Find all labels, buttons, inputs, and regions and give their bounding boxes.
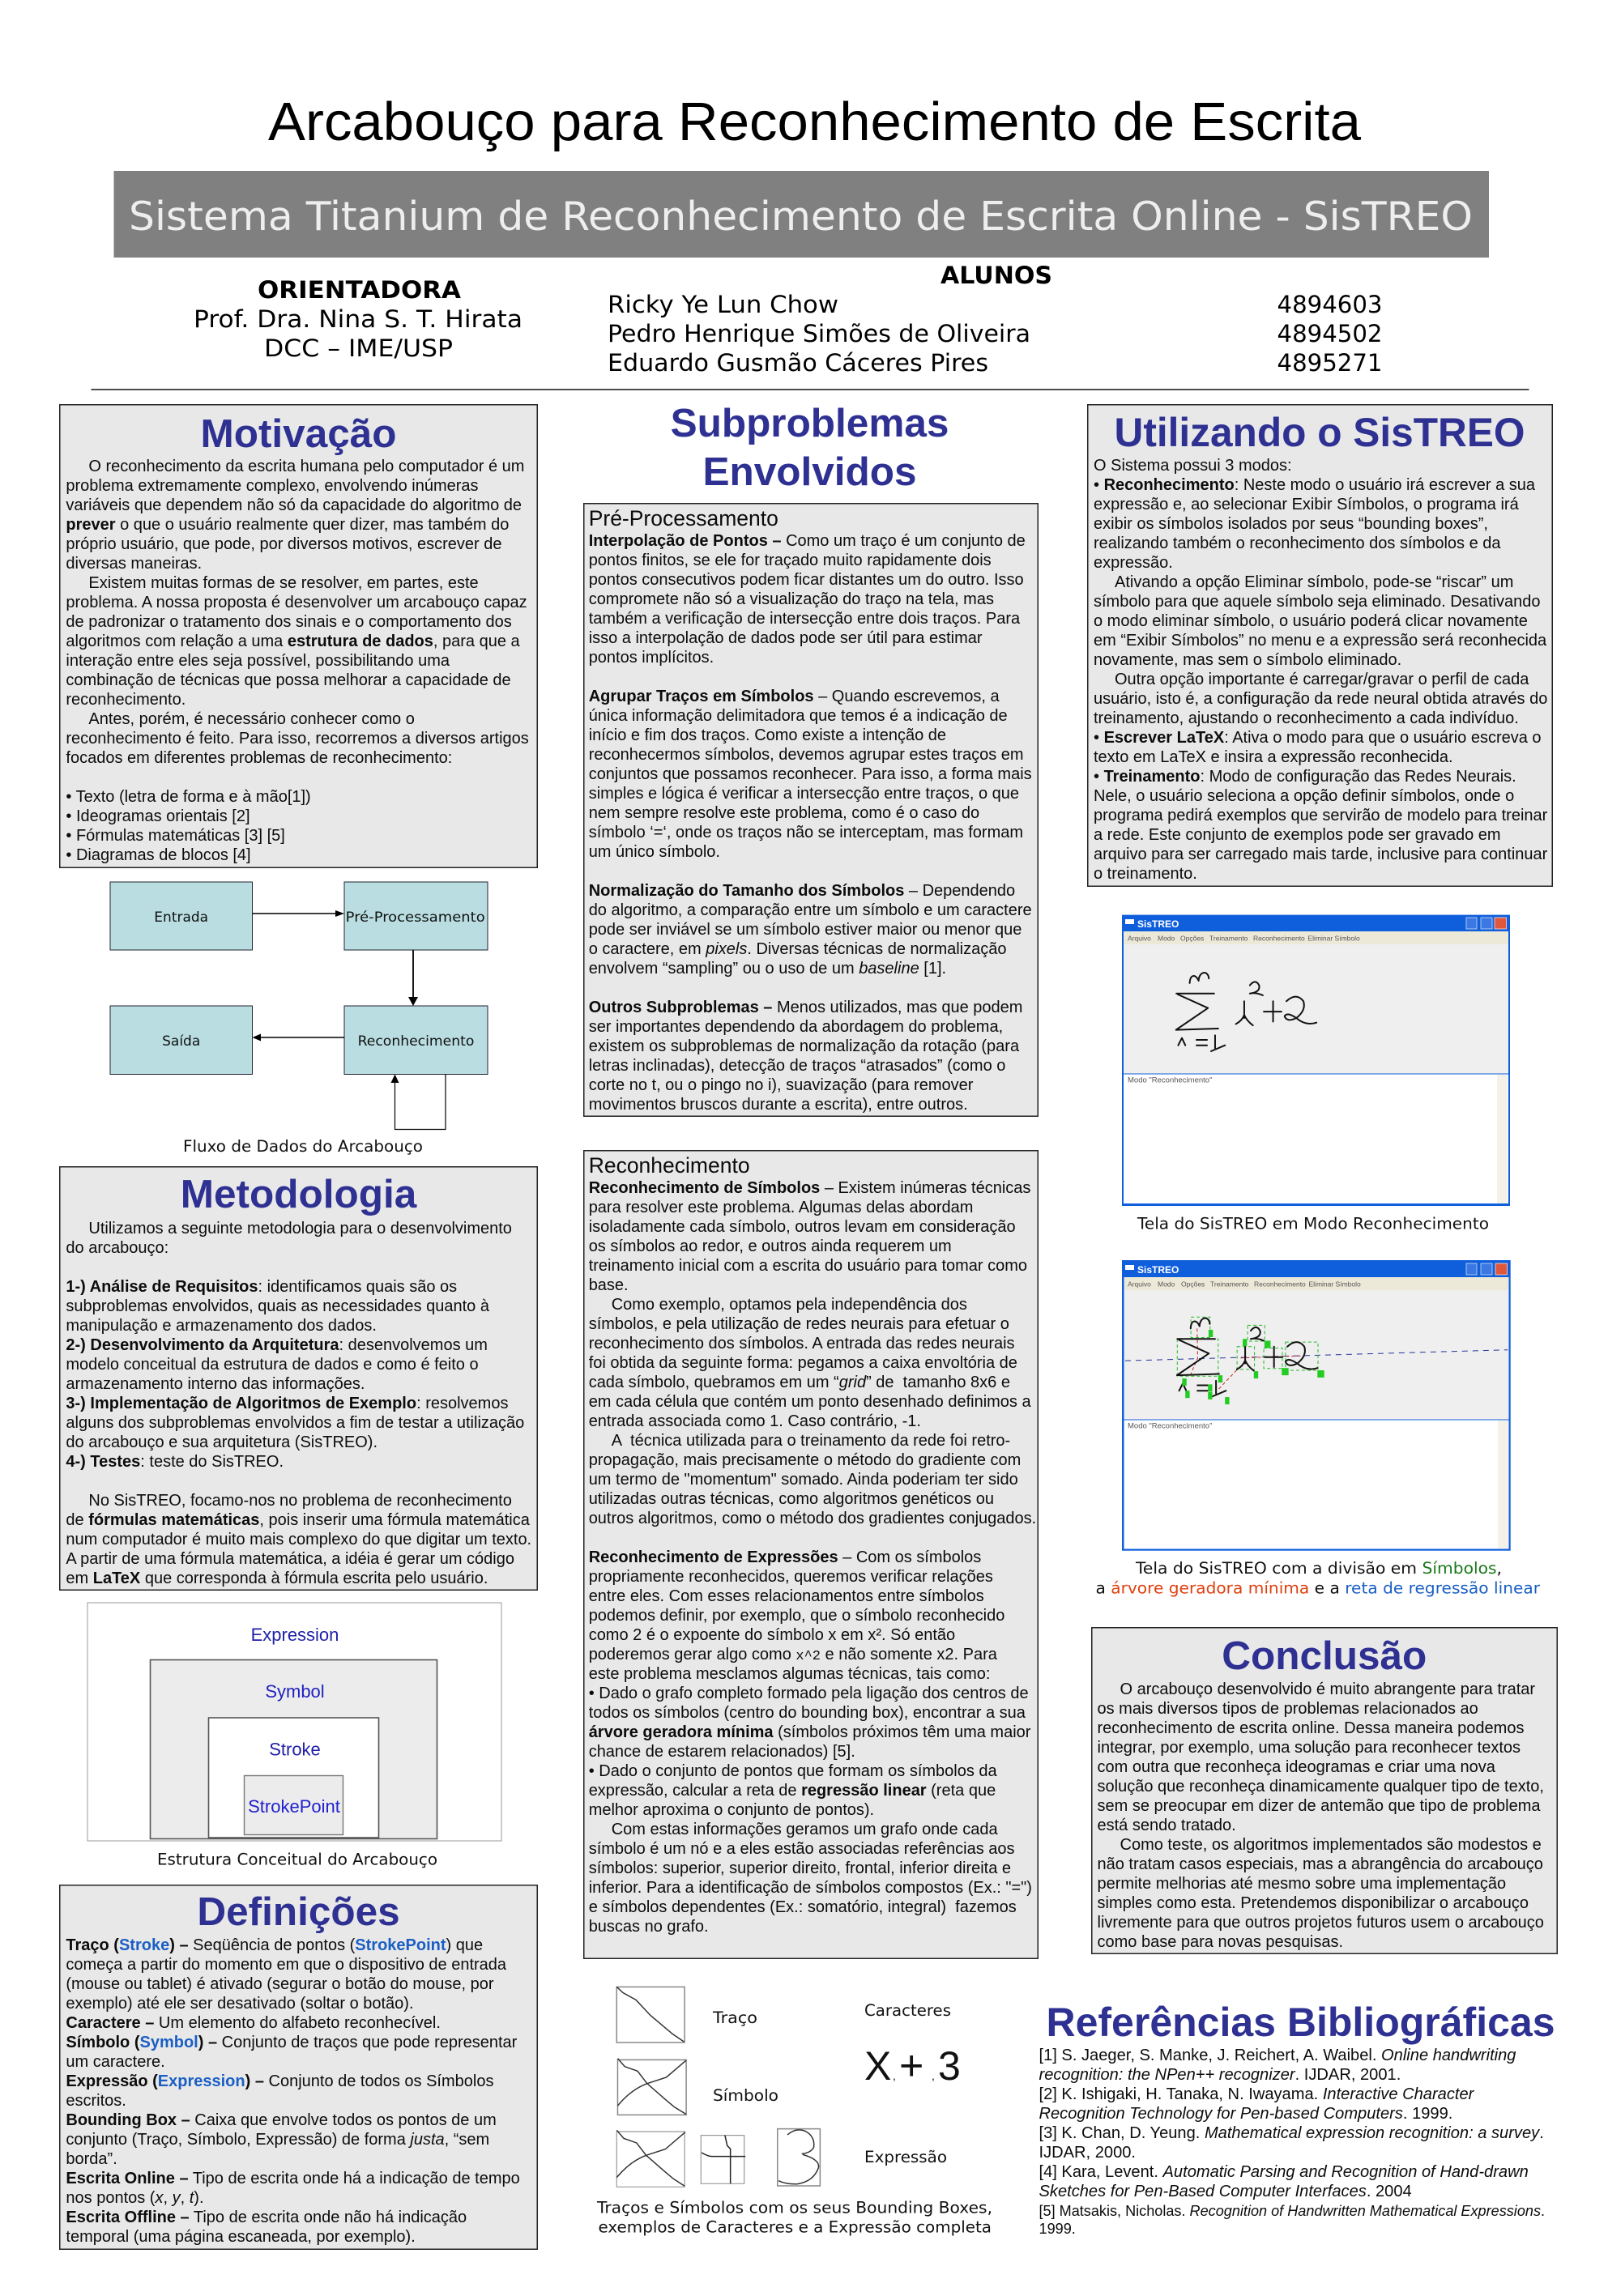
text: Pré-Processamento body: símbolo ‘=‘, onde os traços não se interceptam, mas formam <box>589 824 1023 841</box>
text: Motivação body: diversas maneiras. <box>66 555 202 573</box>
text: Pré-Processamento body: início e fim dos traços. Como existe a intenção de <box>589 726 946 744</box>
screenshot: modo reconhecimento <box>1122 915 1510 1206</box>
text: Reconhecimento body: buscas no grafo. <box>589 1918 709 1936</box>
text: Reconhecimento body: entrada associada como 1. Caso contrário, -1. <box>589 1412 921 1430</box>
characters example: 3 <box>938 2043 961 2089</box>
text: Utilizando body: realizando também o reconhecimento dos símbolos e da <box>1094 535 1500 552</box>
characters example: X <box>864 2043 891 2089</box>
text: Reconhecimento body: outros algoritmos, como o método dos gradientes conjugados. <box>589 1510 1036 1527</box>
text: Definições body <box>66 1936 520 2246</box>
text: Utilizando body: treinamento, ajustando o reconhecimento a cada indivíduo. <box>1094 709 1519 727</box>
icon: símbolo box <box>617 2059 686 2115</box>
diagram: estrutura conceitual: Stroke <box>269 1740 321 1760</box>
text: Pré-Processamento body: corte no t, ou o pingo no i), suavização (para remover <box>589 1076 973 1094</box>
text: Metodologia body: num computador é muito mais complexo do que digitar um texto. <box>66 1531 531 1548</box>
text: Utilizando body: novamente, mas sem o símbolo eliminado. <box>1094 651 1401 669</box>
screenshot: modo reconhecimento: Opções <box>1180 935 1204 943</box>
text: Reconhecimento body: Reconhecimento de Expressões – Com os símbolos <box>589 1548 981 1566</box>
text: Utilizando body: a rede. Este conjunto de exemplos pode ser gravado em <box>1094 826 1501 844</box>
text: referências <box>1039 2047 1545 2237</box>
text: Conclusão body: com outra que reconheça ideogramas e criar uma nova <box>1097 1758 1495 1776</box>
text: Metodologia body <box>66 1220 531 1587</box>
text: Motivação body: combinação de técnicas que possa melhorar a capacidade de <box>66 671 511 689</box>
text: Conclusão body: como base para novas pesquisas. <box>1097 1933 1343 1951</box>
label: Expressão: Expressão <box>864 2148 947 2166</box>
text: referências: recognition: the NPen++ recognizer. IJDAR, 2001. <box>1039 2066 1401 2084</box>
screenshot: divisão em símbolos: SisTREO <box>1137 1264 1179 1276</box>
text: Definições body: Bounding Box – Caixa que envolve todos os pontos de um <box>66 2111 497 2129</box>
box: Saída <box>110 1006 253 1074</box>
text: Motivação body: de padronizar o tratamento dos sinais e o comportamento dos <box>66 613 512 631</box>
heading: Utilizando o SisTREO: Utilizando o SisTREO <box>1115 410 1525 455</box>
heading: Referências Bibliográficas: Referências Bibliográficas <box>1046 1999 1555 2044</box>
text: Pré-Processamento body: pontos implícitos. <box>589 649 714 667</box>
text: Metodologia body: 4-) Testes: teste do SisTREO. <box>66 1453 284 1471</box>
text: Pré-Processamento body: compromete não só a visualização do traço na tela, mas <box>589 590 994 608</box>
text: Pré-Processamento body: o caractere, em pixels. Diversas técnicas de normalização <box>589 940 1006 958</box>
text: Utilizando body: programa pedirá exemplos que servirão de modelo para treinar <box>1094 807 1547 824</box>
text: Pré-Processamento body: conjuntos que possamos reconhecer. Para isso, a forma mais <box>589 765 1032 783</box>
advisor block <box>194 276 522 362</box>
text: Definições body: Escrita Offline – Tipo de escrita onde não há indicação <box>66 2209 467 2226</box>
text: Utilizando body: arquivo para ser carregado mais tarde, inclusive para continuar <box>1094 846 1547 863</box>
text: Reconhecimento body: melhor aproxima o conjunto de pontos). <box>589 1801 874 1819</box>
text: Pré-Processamento body: envolvem “sampling” ou o uso de um baseline [1]. <box>589 960 946 978</box>
text: Metodologia body: do arcabouço: <box>66 1239 168 1257</box>
heading: Subproblemas Envolvidos <box>671 401 949 494</box>
text: Pré-Processamento body: nem sempre resolve este problema, como é o caso do <box>589 804 979 822</box>
panel: Reconhecimento <box>583 1150 1039 1959</box>
text: Reconhecimento body: árvore geradora mínima (símbolos próximos têm uma maior <box>589 1723 1030 1741</box>
text: Motivação body: reconhecimento. <box>66 691 186 709</box>
text: Motivação body <box>66 458 529 864</box>
screenshot: divisão em símbolos: Reconhecimento <box>1254 1280 1306 1288</box>
text: Pré-Processamento body: existem os subproblemas de normalização da rotação (para <box>589 1037 1019 1055</box>
text: Utilizando body: Ativando a opção Eliminar símbolo, pode-se “riscar” um <box>1115 573 1513 591</box>
text: Pré-Processamento body: movimentos bruscos durante a escrita), entre outros. <box>589 1096 968 1114</box>
advisor block: ORIENTADORA <box>258 276 462 304</box>
text: Motivação body: reconhecimento é feito. Para isso, recorremos a diversos artigos <box>66 730 529 748</box>
text: Reconhecimento body: utilizadas outras técnicas, como algoritmos genéticos ou <box>589 1490 994 1508</box>
text: Reconhecimento body: isoladamente cada símbolo, outros levam em consideração <box>589 1218 1016 1236</box>
text: Reconhecimento body: os símbolos ao redor, e outros ainda requerem um <box>589 1237 952 1255</box>
box: Saída: Saída <box>162 1033 200 1050</box>
screenshot: modo reconhecimento: Modo "Reconhecimento" <box>1128 1076 1212 1085</box>
text: Utilizando body: • Reconhecimento: Neste modo o usuário irá escrever a sua <box>1094 476 1535 494</box>
arrow: Pré-Processamento to Reconhecimento <box>408 950 418 1006</box>
title: Arcabouço para Reconhecimento de Escrita <box>268 92 1362 152</box>
text: Definições body: (mouse ou tablet) é ativado (segurar o botão do mouse, por <box>66 1975 493 1993</box>
caption: divisão em símbolos: Tela do SisTREO com a divisão em Símbolos, <box>1135 1559 1502 1578</box>
text: Conclusão body: integrar, por exemplo, uma solução para reconhecer textos <box>1097 1739 1521 1757</box>
text: Reconhecimento body <box>589 1179 1036 1936</box>
label: Traço: Traço <box>712 2008 757 2027</box>
text: Reconhecimento body: e símbolos dependentes (Ex.: somatório, integral) fazemos <box>589 1898 1017 1916</box>
students block: 4894502 <box>1277 320 1382 347</box>
text: Metodologia body: alguns dos subproblemas envolvidos a fim de testar a utilização <box>66 1414 524 1432</box>
text: Pré-Processamento body: letras inclinadas), detecção de traços “atrasados” (como o <box>589 1057 1005 1075</box>
icon: expressão x <box>616 2130 685 2187</box>
text: Definições body: começa a partir do momento em que o dispositivo de entrada <box>66 1956 506 1974</box>
text: Conclusão body: livremente para que outros projetos futuros usem o arcabouço <box>1097 1914 1544 1932</box>
box: Entrada: Entrada <box>154 909 208 926</box>
caption: estrutura: Estrutura Conceitual do Arcabouço <box>157 1851 437 1869</box>
text: Pré-Processamento body: Outros Subproblemas – Menos utilizados, mas que podem <box>589 999 1022 1016</box>
screenshot: divisão em símbolos: Opções <box>1181 1280 1205 1288</box>
text: Motivação body: focados em diferentes problemas de reconhecimento: <box>66 749 452 767</box>
text: Pré-Processamento body: ser importantes dependendo da abordagem do problema, <box>589 1018 1003 1036</box>
text: Metodologia body: armazenamento interno das informações. <box>66 1375 365 1393</box>
text: Metodologia body: subproblemas envolvidos, quais as necessidades quanto à <box>66 1297 489 1315</box>
screenshot: divisão em símbolos: Modo <box>1158 1280 1175 1288</box>
text: Pré-Processamento body: única informação delimitadora que temos é a indicação de <box>589 707 1008 725</box>
text: Conclusão body: não tratam casos especiais, mas a abrangência do arcabouço <box>1097 1855 1543 1873</box>
text: Metodologia body: manipulação e armazenamento dos dados. <box>66 1317 377 1335</box>
screenshot: modo reconhecimento: Eliminar Símbolo <box>1307 935 1360 943</box>
icon: traço box <box>616 1987 685 2043</box>
text: Metodologia body: de fórmulas matemáticas, pois inserir uma fórmula matemática <box>66 1511 530 1529</box>
text: Reconhecimento body: símbolo é um nó e a eles estão associadas referências aos <box>589 1840 1015 1858</box>
text: Definições body: Escrita Online – Tipo de escrita onde há a indicação de tempo <box>66 2170 520 2187</box>
panel: Pré-Processamento <box>583 502 1039 1116</box>
heading: Reconhecimento: Reconhecimento <box>589 1153 750 1178</box>
text: referências: Sketches for Pen-Based Computer Interfaces. 2004 <box>1039 2183 1412 2200</box>
text: Reconhecimento body: como 2 é o expoente do símbolo x em x². Só então <box>589 1626 955 1644</box>
text: Motivação body: • Fórmulas matemáticas [3] [5] <box>66 827 285 845</box>
screenshot: divisão em símbolos: Eliminar Símbolo <box>1309 1280 1361 1288</box>
text: Pré-Processamento body: do algoritmo, a comparação entre um símbolo e um caractere <box>589 901 1032 919</box>
caption: divisão em símbolos <box>1095 1559 1541 1597</box>
caption: fluxo: Fluxo de Dados do Arcabouço <box>183 1137 423 1156</box>
caption: traços e símbolos: exemplos de Caracteres e a Expressão completa <box>598 2218 992 2237</box>
text: Reconhecimento body: • Dado o conjunto de pontos que formam os símbolos da <box>589 1762 997 1780</box>
text: Reconhecimento body: cada símbolo, quebramos em um “grid” de tamanho 8x6 e <box>589 1374 1010 1391</box>
text: Utilizando body: texto em LaTeX e insira a expressão reconhecida. <box>1094 748 1453 766</box>
text: Reconhecimento body: inferior. Para a identificação de símbolos compostos (Ex.: "=") <box>589 1879 1032 1897</box>
box: Pré-Processamento <box>344 882 488 950</box>
text: Conclusão body: simples como esta. Pretendemos disponibilizar o arcabouço <box>1097 1894 1529 1912</box>
text: Motivação body: variáveis que dependem não só da capacidade do algoritmo de <box>66 496 522 514</box>
screenshot: modo reconhecimento: Arquivo <box>1128 935 1151 943</box>
box: Reconhecimento <box>344 1006 488 1074</box>
text: Reconhecimento body: podemos definir, por exemplo, que o símbolo reconhecido <box>589 1607 1004 1625</box>
text: Conclusão body: Como teste, os algoritmos implementados são modestos e <box>1120 1836 1542 1854</box>
text: Reconhecimento body: treinamento inicial com a escrita do usuário para tomar como <box>589 1257 1027 1275</box>
characters example: + <box>899 2043 923 2089</box>
text: Pré-Processamento body: Normalização do Tamanho dos Símbolos – Dependendo <box>589 882 1015 900</box>
text: Definições body: escritos. <box>66 2092 126 2110</box>
text: Metodologia body: modelo conceitual da estrutura de dados e como é feito o <box>66 1356 479 1374</box>
screenshot: divisão em símbolos: Arquivo <box>1128 1280 1151 1288</box>
text: Conclusão body: sem se preocupar em dizer de antemão que tipo de problema <box>1097 1797 1540 1815</box>
screenshot: modo reconhecimento: SisTREO <box>1137 918 1179 930</box>
heading: Subproblemas Envolvidos: Subproblemas <box>671 401 949 445</box>
text: Reconhecimento body: chance de estarem relacionados) [5]. <box>589 1743 855 1761</box>
text: Motivação body: O reconhecimento da escrita humana pelo computador é um <box>88 458 524 475</box>
text: Reconhecimento body: reconhecimento dos símbolos. A entrada das redes neurais <box>589 1335 1015 1352</box>
caption: divisão em símbolos: a árvore geradora mínima e a reta de regressão linear <box>1095 1579 1541 1597</box>
text: Definições body: conjunto (Traço, Símbolo, Expressão) de forma justa, “sem <box>66 2131 489 2149</box>
text: Reconhecimento body: A técnica utilizada para o treinamento da rede foi retro- <box>612 1432 1010 1450</box>
text: Conclusão body: solução que reconheça dinamicamente qualquer tipo de texto, <box>1097 1778 1544 1795</box>
screenshot: modo reconhecimento: Reconhecimento <box>1253 935 1305 943</box>
text: Conclusão body: reconhecimento de escrita online. Dessa maneira podemos <box>1097 1719 1524 1737</box>
text: Pré-Processamento body: pontos consecutivos podem ficar distantes um do outro. Isso <box>589 571 1024 589</box>
text: referências: [3] K. Chan, D. Yeung. Mathematical expression recognition: a survey. <box>1039 2124 1544 2142</box>
screenshot: divisão em símbolos: Treinamento <box>1210 1280 1249 1288</box>
students block: ALUNOS <box>940 262 1052 289</box>
text: Metodologia body: do arcabouço e sua arquitetura (SisTREO). <box>66 1433 377 1451</box>
text: Utilizando body: O Sistema possui 3 modos: <box>1094 457 1292 475</box>
text: Metodologia body: 2-) Desenvolvimento da Arquitetura: desenvolvemos um <box>66 1336 488 1354</box>
text: Pré-Processamento body: Interpolação de Pontos – Como um traço é um conjunto de <box>589 532 1026 550</box>
heading: Metodologia: Metodologia <box>181 1171 416 1216</box>
text: Metodologia body: 3-) Implementação de Algoritmos de Exemplo: resolvemos <box>66 1395 508 1412</box>
text: Utilizando body <box>1094 457 1547 883</box>
text: Reconhecimento body: entre eles. Com esses relacionamentos entre símbolos <box>589 1587 984 1605</box>
text: Motivação body: problema extremamente complexo, envolvendo inúmeras <box>66 477 479 495</box>
text: Metodologia body: Utilizamos a seguinte metodologia para o desenvolvimento <box>88 1220 512 1237</box>
text: Reconhecimento body: expressão, calcular a reta de regressão linear (reta que <box>589 1782 996 1800</box>
figure: traços e bounding boxes <box>616 1987 820 2187</box>
text: Utilizando body: expressão e, ao selecionar Exibir Símbolos, o programa irá <box>1094 496 1519 513</box>
characters example: , <box>893 2069 896 2082</box>
panel: Metodologia <box>59 1166 538 1591</box>
text: Definições body: borda”. <box>66 2150 117 2168</box>
text: referências: [1] S. Jaeger, S. Manke, J. Reichert, A. Waibel. Online handwriting <box>1039 2047 1516 2064</box>
text: Reconhecimento body: este problema mesclamos algumas técnicas, tais como: <box>589 1665 990 1683</box>
text: Definições body: nos pontos (x, y, t). <box>66 2189 204 2207</box>
characters example <box>864 2043 961 2089</box>
screenshot: divisão em símbolos: Modo "Reconhecimento" <box>1128 1422 1212 1430</box>
text: Reconhecimento body: base. <box>589 1276 629 1294</box>
caption: traços e símbolos <box>596 2199 992 2237</box>
students block <box>608 262 1382 377</box>
text: Conclusão body: permite melhorias até mesmo sobre uma implementação <box>1097 1875 1506 1893</box>
arrow: feedback loop <box>390 1074 446 1129</box>
text: Reconhecimento body: símbolos, e pela utilização de redes neurais para efetuar o <box>589 1315 1009 1333</box>
box: Pré-Processamento: Pré-Processamento <box>346 909 485 926</box>
text: Utilizando body: o treinamento. <box>1094 865 1197 883</box>
text: Motivação body: • Texto (letra de forma e à mão[1]) <box>66 788 311 806</box>
text: referências: Recognition Technology for Pen-based Computers. 1999. <box>1039 2105 1452 2123</box>
text: Metodologia body: 1-) Análise de Requisitos: identificamos quais são os <box>66 1278 457 1296</box>
text: Metodologia body: em LaTeX que corresponda à fórmula escrita pelo usuário. <box>66 1570 488 1587</box>
text: Reconhecimento body: Como exemplo, optamos pela independência dos <box>612 1296 967 1314</box>
text: Reconhecimento body: • Dado o grafo completo formado pela ligação dos centros de <box>589 1685 1029 1702</box>
arrow: Reconhecimento to Saída <box>253 1033 344 1042</box>
text: Pré-Processamento body: um único símbolo. <box>589 843 720 861</box>
text: Reconhecimento body: em cada célula que contém um ponto desenhado definimos a <box>589 1393 1031 1411</box>
text: Motivação body: Antes, porém, é necessário conhecer como o <box>88 710 415 728</box>
screenshot: modo reconhecimento: Modo <box>1158 935 1175 943</box>
text: Reconhecimento body: símbolos: superior, superior direito, frontal, inferior direita e <box>589 1859 1011 1877</box>
text: Reconhecimento body: Reconhecimento de Símbolos – Existem inúmeras técnicas <box>589 1179 1030 1197</box>
icon: expressão three <box>778 2129 820 2186</box>
students block: 4895271 <box>1277 349 1382 377</box>
text: Pré-Processamento body <box>589 532 1032 1114</box>
text: Pré-Processamento body: reconhecermos símbolos, devemos agrupar estes traços em <box>589 746 1024 764</box>
caption: modo reconhecimento: Tela do SisTREO em Modo Reconhecimento <box>1137 1214 1489 1233</box>
text: Definições body: Expressão (Expression) – Conjunto de todos os Símbolos <box>66 2072 493 2090</box>
students block: 4894603 <box>1277 291 1382 318</box>
text: referências: [2] K. Ishigaki, H. Tanaka, N. Iwayama. Interactive Character <box>1039 2085 1474 2103</box>
heading: Motivação: Motivação <box>200 411 397 455</box>
text: Definições body: temporal (uma página escaneada, por exemplo). <box>66 2228 416 2246</box>
text: Reconhecimento body: Com estas informações geramos um grafo onde cada <box>612 1821 998 1838</box>
panel: Utilizando o SisTREO <box>1087 404 1552 887</box>
text: Definições body: Traço (Stroke) – Seqüência de pontos (StrokePoint) que <box>66 1936 483 1954</box>
text: Definições body: Símbolo (Symbol) – Conjunto de traços que pode representar <box>66 2034 517 2051</box>
text: Reconhecimento body: propriamente reconhecidos, queremos verificar relações <box>589 1568 993 1586</box>
text: Definições body: exemplo) até ele ser desativado (soltar o botão). <box>66 1995 414 2013</box>
arrow: Entrada to Pré-Processamento <box>253 910 344 917</box>
text: Utilizando body: • Escrever LaTeX: Ativa o modo para que o usuário escreva o <box>1094 729 1542 747</box>
heading: Conclusão: Conclusão <box>1222 1633 1427 1678</box>
text: Conclusão body: os mais diversos tipos de problemas relacionados ao <box>1097 1700 1478 1718</box>
text: Pré-Processamento body: pontos finitos, se ele for traçado muito rapidamente dois <box>589 552 992 569</box>
flow chart <box>110 882 488 1129</box>
subtitle banner: Sistema Titanium de Reconhecimento de Escrita Online - SisTREO <box>129 194 1473 240</box>
text: Definições body: Caractere – Um elemento do alfabeto reconhecível. <box>66 2014 441 2032</box>
text: Metodologia body: No SisTREO, focamo-nos no problema de reconhecimento <box>88 1492 512 1510</box>
text: Reconhecimento body: um termo de "momentum" somado. Ainda poderiam ter sido <box>589 1471 1018 1489</box>
text: Conclusão body: está sendo tratado. <box>1097 1817 1236 1834</box>
diagram: estrutura conceitual: StrokePoint <box>248 1796 340 1817</box>
text: Pré-Processamento body: isso a interpolação de dados pode ser útil para estimar <box>589 629 983 647</box>
heading: Pré-Processamento: Pré-Processamento <box>589 506 778 530</box>
text: Motivação body: interação entre eles seja possível, possibilitando uma <box>66 652 450 670</box>
advisor block: Prof. Dra. Nina S. T. Hirata <box>194 305 522 333</box>
characters example: , <box>932 2069 935 2082</box>
text: Motivação body: prever o que o usuário realmente quer dizer, mas também do <box>66 516 509 534</box>
text: Reconhecimento body: poderemos gerar algo como x^2 e não somente x2. Para <box>589 1646 997 1664</box>
text: Utilizando body: o modo eliminar símbolo, o usuário poderá clicar novamente <box>1094 612 1528 630</box>
text: referências: [5] Matsakis, Nicholas. Recognition of Handwritten Mathematical Expressions. <box>1039 2203 1545 2219</box>
text: Reconhecimento body: para resolver este problema. Algumas delas abordam <box>589 1199 973 1216</box>
students block: Eduardo Gusmão Cáceres Pires <box>608 349 988 377</box>
diagram: estrutura conceitual <box>87 1603 501 1841</box>
text: Pré-Processamento body: pode ser inviável se um símbolo estiver maior ou menor que <box>589 921 1022 939</box>
box: Reconhecimento: Reconhecimento <box>358 1033 474 1050</box>
label: Caracteres: Caracteres <box>864 2001 951 2020</box>
text: Utilizando body: • Treinamento: Modo de configuração das Redes Neurais. <box>1094 768 1516 786</box>
text: Motivação body: problema. A nossa proposta é desenvolver um arcabouço capaz <box>66 594 527 611</box>
text: referências: [4] Kara, Levent. Automatic Parsing and Recognition of Hand-drawn <box>1039 2163 1529 2181</box>
text: Motivação body: próprio usuário, que pode, por diversos motivos, escrever de <box>66 535 501 553</box>
box: Entrada <box>110 882 253 950</box>
text: Utilizando body: usuário, isto é, a configuração da rede neural obtida através do <box>1094 690 1547 708</box>
panel: Conclusão <box>1091 1626 1557 1954</box>
text: Pré-Processamento body: Agrupar Traços em Símbolos – Quando escrevemos, a <box>589 688 1000 705</box>
advisor block: DCC – IME/USP <box>264 334 453 362</box>
text: Pré-Processamento body: simples e lógica é verificar a intersecção entre traços, o que <box>589 785 1019 803</box>
screenshot: divisão em símbolos <box>1122 1260 1511 1551</box>
icon: expressão plus <box>701 2136 745 2183</box>
text: Motivação body: • Ideogramas orientais [2] <box>66 807 250 825</box>
text: Conclusão body <box>1097 1680 1544 1951</box>
subtitle banner <box>113 171 1489 258</box>
text: Reconhecimento body: propagação, mais precisamente o método do gradiente com <box>589 1451 1021 1469</box>
text: Metodologia body: A partir de uma fórmula matemática, a idéia é gerar um código <box>66 1550 514 1568</box>
text: referências: IJDAR, 2000. <box>1039 2144 1136 2162</box>
text: Motivação body: algoritmos com relação a uma estrutura de dados, para que a <box>66 633 520 650</box>
text: Pré-Processamento body: também a verificação de intersecção entre dois traços. Para <box>589 610 1020 628</box>
diagram: estrutura conceitual: Expression <box>251 1625 339 1645</box>
text: Reconhecimento body: todos os símbolos (centro do bounding box), encontrar a sua <box>589 1704 1026 1722</box>
text: Utilizando body: símbolo para que aquele símbolo seja eliminado. Desativando <box>1094 593 1540 611</box>
text: referências: 1999. <box>1039 2221 1076 2237</box>
students block: Ricky Ye Lun Chow <box>608 291 838 318</box>
text: Utilizando body: exibir os símbolos isolados por seus “bounding boxes”, <box>1094 515 1488 533</box>
heading: Subproblemas Envolvidos: Envolvidos <box>702 449 917 494</box>
panel: Definições <box>59 1884 538 2250</box>
caption: traços e símbolos: Traços e Símbolos com os seus Bounding Boxes, <box>596 2199 992 2217</box>
diagram: estrutura conceitual: Symbol <box>265 1681 325 1702</box>
text: Conclusão body: O arcabouço desenvolvido é muito abrangente para tratar <box>1120 1680 1535 1698</box>
students block: Pedro Henrique Simões de Oliveira <box>608 320 1030 347</box>
text: Definições body: um caractere. <box>66 2053 165 2071</box>
text: Utilizando body: em “Exibir Símbolos” no menu e a expressão será reconhecida <box>1094 632 1546 650</box>
text: Utilizando body: Nele, o usuário seleciona a opção definir símbolos, onde o <box>1094 787 1514 805</box>
text: Utilizando body: Outra opção importante é carregar/gravar o perfil de cada <box>1115 671 1529 688</box>
text: Motivação body: Existem muitas formas de se resolver, em partes, este <box>88 574 479 592</box>
label: Símbolo: Símbolo <box>713 2086 778 2105</box>
text: Motivação body: • Diagramas de blocos [4] <box>66 846 251 864</box>
text: Utilizando body: expressão. <box>1094 554 1173 572</box>
text: Reconhecimento body: foi obtida da seguinte forma: pegamos a caixa envoltória de <box>589 1354 1017 1372</box>
heading: Definições: Definições <box>197 1889 400 1934</box>
screenshot: modo reconhecimento: Treinamento <box>1209 935 1248 943</box>
panel: Motivação <box>59 404 538 868</box>
